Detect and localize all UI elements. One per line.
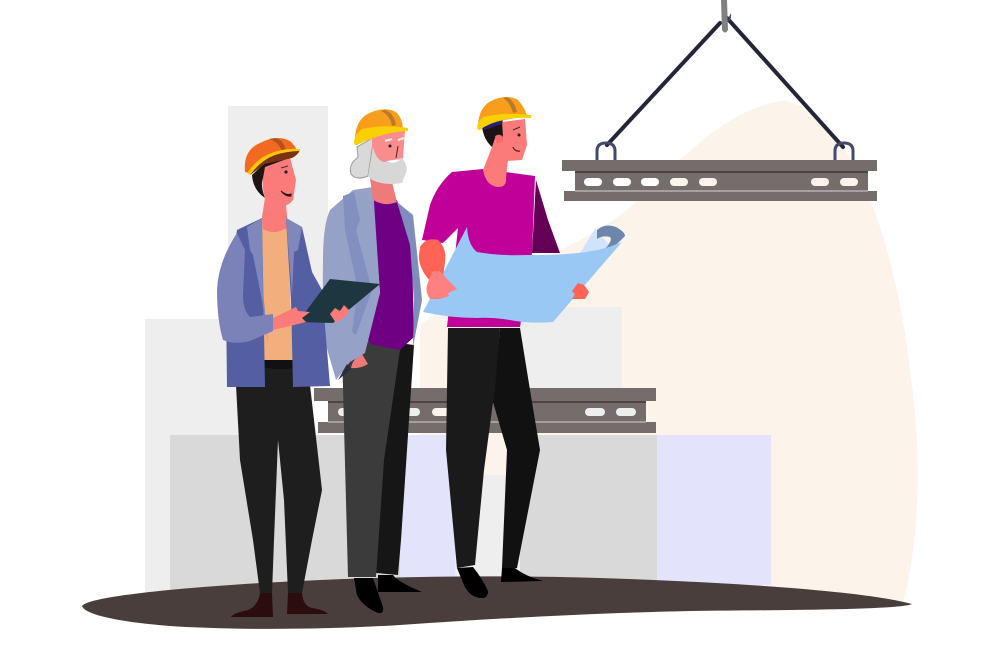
blueprint sheet bbox=[423, 226, 625, 323]
head and neck bbox=[482, 119, 527, 187]
left arm bbox=[419, 239, 445, 282]
purple shirt bbox=[360, 200, 414, 350]
man 1: young engineer with clipboard bbox=[217, 138, 380, 617]
crane sling bbox=[597, 0, 853, 161]
shirt shadow side bbox=[532, 180, 560, 253]
yellow hard hat bbox=[354, 109, 408, 145]
head bbox=[350, 130, 407, 204]
background blob bbox=[420, 101, 918, 605]
man 3: engineer in magenta shirt with blueprint bbox=[419, 97, 625, 598]
yellow hard hat bbox=[477, 97, 531, 130]
background buildings bbox=[145, 106, 771, 594]
steel beam on the ground bbox=[314, 388, 656, 433]
ground shadow bbox=[82, 576, 912, 629]
neck and head bbox=[252, 157, 296, 232]
grey jacket bbox=[323, 187, 422, 380]
orange hard hat bbox=[245, 138, 300, 175]
hoisted steel beam bbox=[562, 160, 877, 201]
shirt bbox=[262, 218, 293, 360]
blue jacket bbox=[217, 218, 330, 387]
trousers and shoes bbox=[231, 360, 328, 617]
trousers and shoes bbox=[342, 340, 422, 613]
magenta shirt bbox=[422, 169, 535, 327]
crane sling and hoisted beam bbox=[562, 0, 877, 201]
man 2: older engineer with white beard bbox=[323, 109, 422, 613]
hands bbox=[426, 271, 589, 299]
clipboard bbox=[298, 279, 380, 323]
hands bbox=[273, 305, 349, 330]
trousers and shoes bbox=[446, 328, 543, 598]
